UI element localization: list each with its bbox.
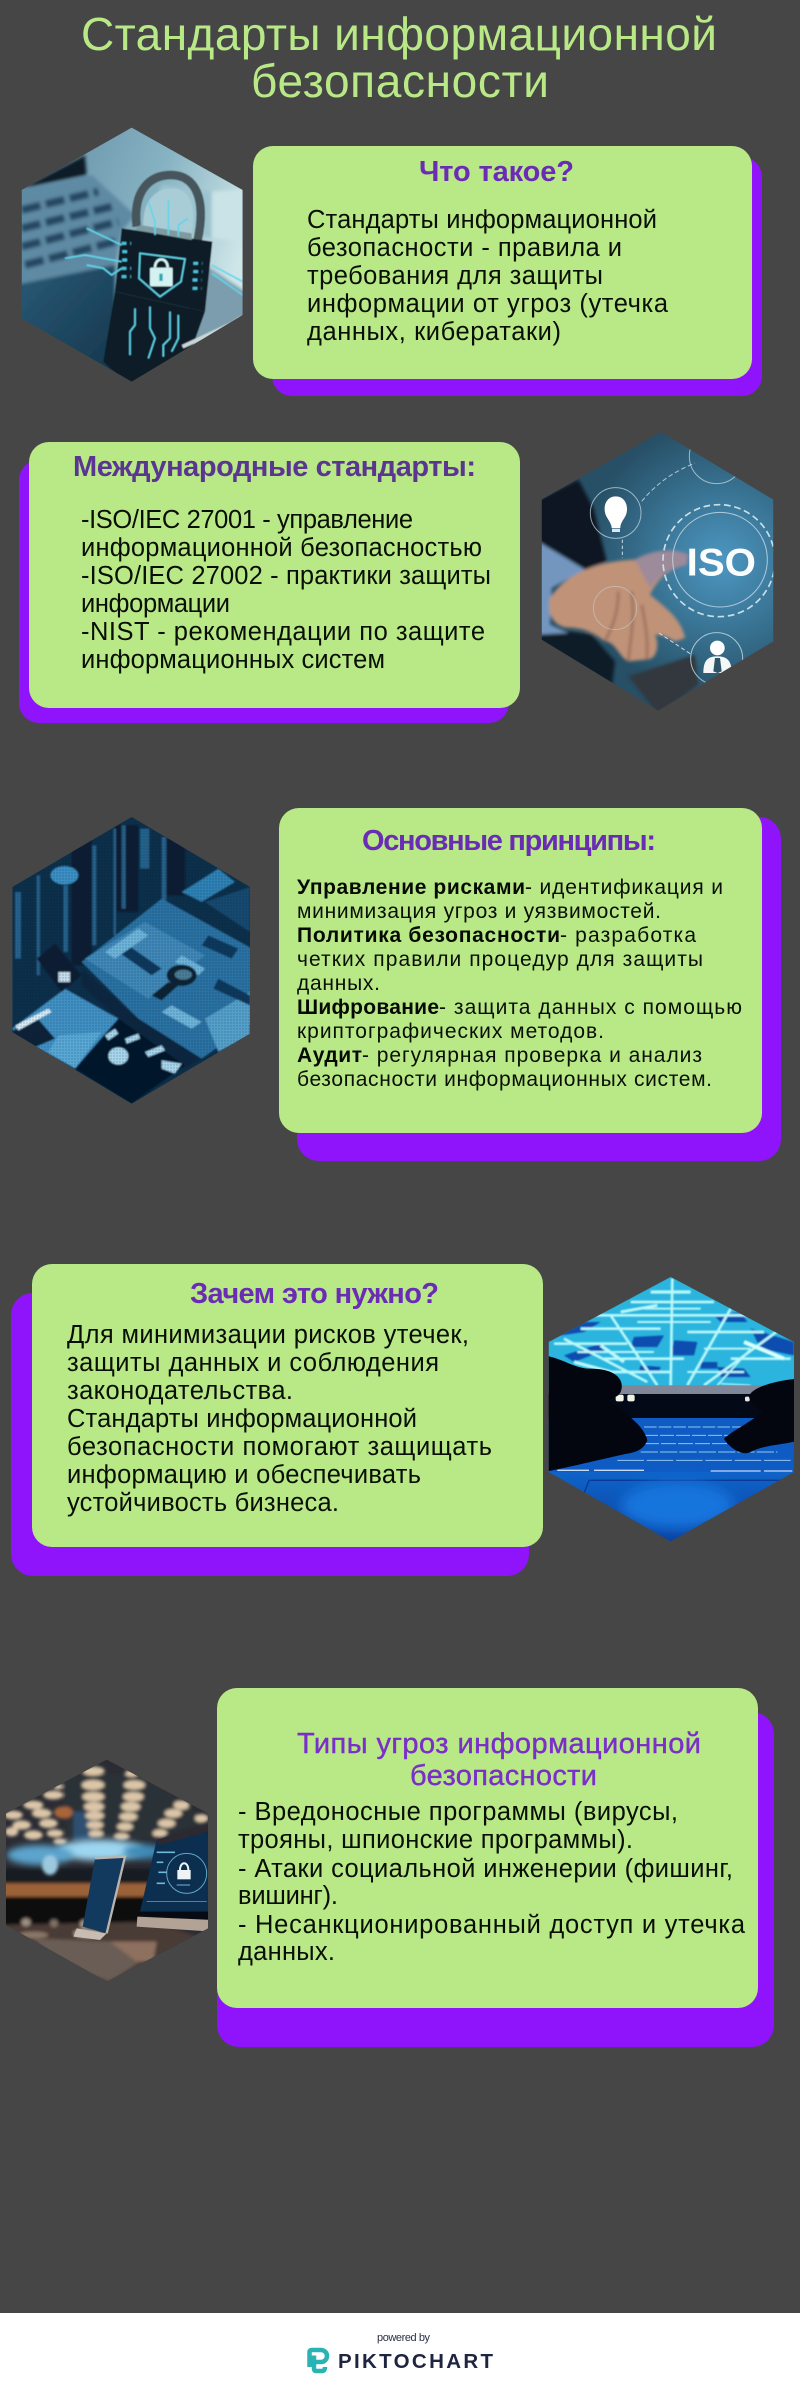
body text: минимизация угроз и уязвимостей. — [297, 900, 661, 923]
panel: international standards — [19, 442, 520, 723]
image: hand pointing at ISO — [535, 428, 780, 716]
body text: безопасности помогают защищать — [67, 1433, 492, 1461]
body text: - разработка — [560, 924, 696, 947]
body text: - регулярная проверка и анализ — [362, 1044, 702, 1067]
heading: Зачем это нужно? — [190, 1278, 439, 1310]
body text: -ISO/IEC 27001 - управление — [81, 506, 413, 534]
body text: безопасности информационных систем. — [297, 1068, 712, 1091]
body text: Аудит — [297, 1044, 362, 1067]
body text: - Несанкционированный доступ и утечка — [238, 1911, 746, 1939]
title: Стандарты информационной — [81, 8, 717, 60]
body text: Политика безопасности — [297, 924, 560, 947]
panel: why it is needed — [11, 1264, 543, 1576]
heading — [297, 1728, 701, 1792]
body text: -NIST - рекомендации по защите — [81, 618, 485, 646]
card — [217, 1688, 758, 2008]
body text: информации от угроз (утечка — [307, 290, 669, 318]
panel: threat types — [217, 1688, 774, 2047]
powered by label: powered by — [377, 2332, 430, 2344]
body text: данных, кибератаки) — [307, 318, 561, 346]
body text: информационной безопасностью — [81, 534, 482, 562]
panel: what is it — [253, 146, 762, 396]
body text: Для минимизации рисков утечек, — [67, 1321, 469, 1349]
body text: данных. — [297, 972, 380, 995]
title: безопасности — [251, 55, 549, 107]
body text — [307, 206, 669, 346]
body text: Стандарты информационной — [307, 206, 657, 234]
card — [253, 146, 752, 379]
image: padlock on laptop — [15, 125, 250, 388]
body text: информации — [81, 590, 230, 618]
body text: защиты данных и соблюдения — [67, 1349, 439, 1377]
body text: криптографических методов. — [297, 1020, 604, 1043]
body text — [67, 1321, 492, 1517]
body text — [238, 1798, 746, 1966]
body text: - идентификация и — [525, 876, 723, 899]
body text: требования для защиты — [307, 262, 603, 290]
body text: вишинг). — [238, 1882, 338, 1910]
body text: безопасности - правила и — [307, 234, 622, 262]
monitor — [140, 1823, 213, 1912]
body text: данных. — [238, 1938, 335, 1966]
title — [81, 8, 717, 107]
body text — [297, 876, 742, 1091]
card shadow — [297, 817, 781, 1161]
heading: Международные стандарты: — [73, 451, 476, 483]
card — [279, 808, 762, 1133]
body text: -ISO/IEC 27002 - практики защиты — [81, 562, 491, 590]
hands — [544, 1355, 798, 1472]
card — [29, 442, 520, 708]
body text: законодательства. — [67, 1377, 293, 1405]
lock block — [82, 899, 258, 1059]
body text: Управление рисками — [297, 876, 525, 899]
body text: устойчивость бизнеса. — [67, 1489, 339, 1517]
card shadow — [11, 1293, 529, 1576]
heading: Типы угроз информационной — [297, 1728, 701, 1760]
image: circuit board with keyhole — [5, 812, 258, 1108]
lower-left board — [12, 989, 118, 1069]
iso label: ISO — [687, 541, 756, 585]
piktochart logo: PIKTOCHART — [338, 2350, 493, 2373]
heading: Основные принципы: — [362, 825, 656, 857]
bulb icon — [605, 496, 627, 528]
card shadow — [272, 157, 762, 396]
body text: трояны, шпионские программы). — [238, 1826, 633, 1854]
body text: информационных систем — [81, 646, 385, 674]
heading: Что такое? — [419, 156, 574, 188]
body text: - Атаки социальной инженерии (фишинг, — [238, 1855, 733, 1883]
card shadow — [217, 1712, 774, 2047]
image: laptops with lock screen — [0, 1755, 213, 1988]
body text: четких правили процедур для защиты — [297, 948, 703, 971]
small laptop — [83, 1857, 125, 1933]
body text — [81, 506, 491, 674]
body text: - защита данных с помощью — [439, 996, 742, 1019]
person icon — [710, 641, 725, 655]
card shadow — [19, 460, 509, 723]
image: hands on keyboard — [544, 1272, 798, 1545]
body text: информацию и обеспечивать — [67, 1461, 421, 1489]
panel: core principles — [279, 808, 781, 1161]
card — [32, 1264, 543, 1547]
body text: - Вредоносные программы (вирусы, — [238, 1798, 678, 1826]
body text: Шифрование — [297, 996, 439, 1019]
heading: безопасности — [410, 1760, 597, 1792]
body text: Стандарты информационной — [67, 1405, 417, 1433]
footer — [0, 2313, 800, 2393]
shackle — [136, 175, 201, 240]
